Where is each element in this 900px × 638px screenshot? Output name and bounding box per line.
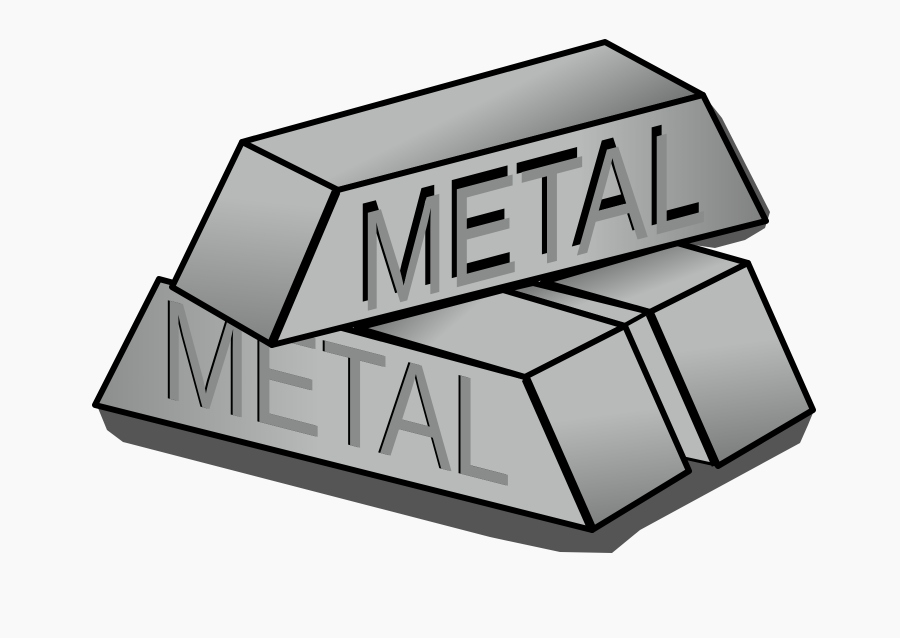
rear ingot top face — [543, 243, 748, 312]
label engraved face: METAL — [161, 268, 511, 518]
rear ingot side strip — [503, 283, 650, 326]
rear ingot — [503, 243, 813, 466]
rear ingot thick edge — [650, 314, 716, 465]
top ingot end face — [172, 142, 338, 345]
cast shadow of top bar — [680, 98, 770, 248]
front ingot label: METAL — [159, 268, 511, 518]
label dark edge: METAL — [354, 85, 702, 335]
front ingot end face — [525, 326, 689, 530]
label dark edge: METAL — [159, 268, 510, 517]
top ingot front face — [272, 95, 766, 345]
front ingot — [95, 279, 689, 530]
top ingot top face — [242, 42, 703, 190]
top ingot label: METAL — [354, 83, 707, 346]
front ingot thick edge — [526, 379, 592, 529]
rear ingot long side — [625, 312, 716, 465]
rear ingot end face — [650, 263, 813, 466]
label engraved face: METAL — [359, 94, 707, 344]
cast shadow under stack — [98, 400, 815, 553]
front ingot top face — [357, 290, 625, 377]
top ingot thick edge — [272, 192, 336, 343]
top ingot — [172, 42, 766, 345]
front ingot long face — [95, 279, 592, 530]
